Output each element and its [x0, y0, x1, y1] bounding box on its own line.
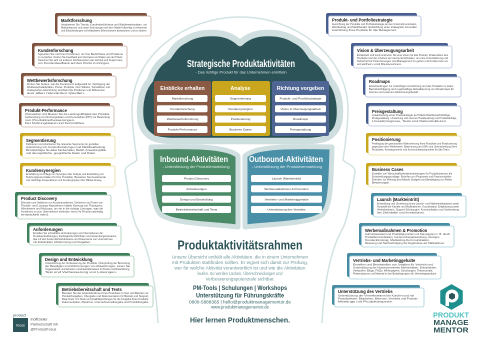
card: Vision: Sicherheit für Finanzierungen und Management zu geben und Konferenzen zu — [357, 59, 448, 63]
card: Produkt- und Portfoliostrategie: Ausrichtung der Produkte und Portfoliostrategie an den Unternehmenszielen, — [332, 22, 417, 26]
tagline: Hier lernen Produktmenschen. — [190, 316, 290, 324]
heading: Outbound: Outbound-Aktivitäten — [249, 155, 323, 164]
card: Launch: Entwicklung und Umsetzung eines Launch- und Markteintrittsplanes sowie — [377, 202, 459, 206]
card: Roadmaps — [363, 74, 461, 97]
logo: product focus: Partnerschaft mit — [30, 322, 58, 326]
card: Werbemaßnahmen — [359, 223, 454, 247]
card: Unterstützung des Vertriebs: Produktwissen. Bearbeiten, Betreuen, Vertriebs und Produkt- — [338, 296, 418, 300]
card: Launch: der Zielmärkte und Investitionen. — [377, 210, 425, 214]
card: Anforderungen: mit Entwicklern Abstimmung und Vorgaben. — [33, 240, 91, 244]
pill: Vertriebs- und Marketinggehalte: Vertriebs- und Marketinggehalte — [265, 197, 309, 201]
card: Betriebsbereitschaft und Tests — [56, 283, 153, 307]
card: Produkt- und Portfoliostrategie — [326, 13, 421, 36]
panel heading: Analyse: Analyse — [231, 86, 251, 92]
description paragraph: laufen. So werden Lücken, Überschneidungen und — [198, 270, 283, 276]
card: Wettbewerbsforschung: strategischen Ausrichtung. Ermitteln Sie Positionen und Differenzen — [27, 88, 105, 92]
panel: Richtung vorgeben — [272, 81, 329, 136]
card: Preisgestaltung: Ausarbeitung einer Preisstrategie auf Markt-Wettbewerbsfähige — [372, 113, 450, 117]
logo: product focus: @ProductFocus — [30, 328, 57, 332]
wordmark: MENTOR — [434, 326, 468, 334]
card: Betriebsbereitschaft und Tests: Betriebsbereitschaft und Tests — [62, 287, 122, 292]
card: Werbemaßnahmen: Kundenbindung, Marketing-Kommunikation. — [365, 238, 430, 242]
card: Wettbewerbsforschung: aus allen relevanten Quellen. — [27, 91, 85, 95]
card: Business Cases: Bewertungen. — [372, 180, 390, 184]
description paragraph: Unsere Übersicht enthält alle Aktivitäten, die in einem Unternehmen — [172, 254, 308, 260]
panel: Inbound-Aktivitäten — [151, 147, 238, 227]
card: Kundensynergien — [20, 163, 115, 187]
card: Segmentierung: Ausrichtung von Kundenbeziehungen und Marktbearbeitung. — [26, 145, 106, 149]
contact details — [189, 300, 292, 310]
card: Kundensynergien: Nutzungspotenzialen für Ihre Produkte. Bewerten Sie bestehende — [26, 175, 106, 179]
card: Unterstützung des Vertriebs: Unterstützung der Vertriebsteams bei Kunden und mit — [338, 294, 414, 298]
card: Positionierung: Produktes, Kernargumente und Kommunikationspunkte für das Team. — [372, 148, 450, 152]
card: Betriebsbereitschaft und Tests: Beta-Tests, UX-Tests und Qualitätsprüfungen für die Freigabe Ihres Produkts. — [62, 297, 149, 301]
card: Produkt- und Portfoliostrategie: Produkt- und Portfoliostrategie — [332, 18, 393, 22]
card: Business Cases: Einholen zur Wirkung des Ablaufs, Budgets und Bestätigung von Risiko — [372, 178, 452, 182]
card: Werbemaßnahmen: Werbemaßnahmen & Promotion — [365, 228, 428, 233]
card: Kundensynergien: Entwicklung und Pflege von Synergien über Analyse und Entwicklung von — [26, 172, 104, 176]
card: Design und Entwicklung: Ungewissheit und Arbeiten mit Entwicklerteams in Praxis und Entwicklung, — [45, 267, 130, 271]
card: Vertriebs- und Marketinggehalte — [347, 253, 441, 279]
pill: Design und Entwicklung: Design und Entwicklung — [180, 197, 213, 201]
pill: Betriebsbereitschaft und Tests: Betriebsbereitschaft und Tests — [176, 208, 218, 212]
card: Segmentierung — [20, 133, 115, 158]
card: Roadmaps: Roadmaps — [369, 79, 391, 84]
card: Kundensynergien: Kundensynergien — [26, 168, 61, 173]
card: Design und Entwicklung: Unterstützung der Verbesserung der Produkte, Überprüfung der Benutzung — [45, 261, 130, 265]
card: Launch: Vertriebsteams, Support-Schulungen, Kommunikation und Vorbereitung — [377, 208, 459, 212]
card: Positionierung — [366, 133, 461, 155]
pill: Segmentierung: Segmentierung — [230, 97, 251, 101]
card: Unterstützung des Vertriebs: Unterstützung des Vertriebs — [338, 289, 393, 294]
description paragraph: mit Produkten stattfinden sollten. Er eignet sich damit zur Prüfung, — [172, 260, 308, 265]
contact details: www.produktmanagementor.de — [211, 304, 269, 310]
pill: Wettbewerbsforschung: Wettbewerbsforschung — [167, 117, 199, 121]
pill: Vision: Vision & Überzeugungsarbeit — [280, 107, 321, 111]
card: Werbemaßnahmen: Produktkommunikation, Content-Übergabewerbung, Anzeigen, — [365, 235, 440, 239]
icon: hexagon — [441, 285, 462, 309]
card: Preisgestaltung: Preisgestaltung. Umsetzung und internen Preisberatung und Produktabfolge, — [372, 116, 457, 120]
panel heading: Richtung vorgeben: Richtung vorgeben — [277, 86, 324, 92]
card: Marktforschung: und Entscheidungen mit belastbaren Erkenntnissen abzusichern und zu stützen. — [61, 28, 147, 32]
heading: Inbound: Inbound-Aktivitäten — [160, 155, 228, 164]
main title: Produktaktivitätsrahmen — [178, 238, 302, 252]
card: Business Cases: Erstellen von Wirtschaftlichkeitsbetrachtungen für Produktchancen als — [372, 172, 453, 176]
heading: strategic activities: Strategische Produktaktivitäten — [187, 59, 295, 70]
card: Marktforschung: Analysieren Sie Trends, Kundenbedürfnisse und Wettbewerbsdaten, um — [61, 22, 148, 26]
card: Design und Entwicklung: Test und Verbesserung von Lösungen. — [45, 270, 117, 274]
card: Vision: Entwickeln und kommunizieren Sie eine Vision für das Produkt. Präsentation des — [357, 53, 449, 57]
pill: Product Discovery: Product Discovery — [184, 177, 210, 181]
card: Produkt-Performance — [19, 103, 114, 127]
panel heading: Einblicke erhalten: Einblicke erhalten — [160, 86, 205, 92]
card: Anforderungen: Erstellen Sie einheitliche Anforderungen und Informationen der — [33, 231, 103, 235]
card: Anforderungen: Produktentwicklungen, Fachlogische Richtlinien und Anwendungsszenarien, — [33, 234, 117, 238]
card: Betriebsbereitschaft und Tests: Dokumentation, Abnahme, Unternehmensübergabe und Produktfreigabe. — [62, 300, 149, 304]
card: Positionierung: Positionierung — [372, 137, 401, 142]
card: Product Discovery: Wireframes und Mockups, um sie in die richtige Lösungen, was die — [21, 206, 103, 210]
card: Produkt-Performance: Überwachen und Messen Sie die Leistungsfähigkeit des Produkts. — [25, 112, 110, 116]
pill: Anforderungen: Anforderungen — [186, 187, 207, 191]
card: Design und Entwicklung: Design und Entwicklung — [45, 257, 93, 262]
logo: product focus: product — [13, 312, 27, 318]
card: Vertriebs- und Marketinggehalte: Vertriebs- und Marketinggehalte — [353, 258, 416, 263]
card: Unterstützung des Vertriebs — [332, 285, 424, 307]
subheading: strategic activities: - Das richtige Produkt für das Unternehmen ermitteln — [196, 70, 286, 74]
card: Anforderungen: Anforderungen — [33, 227, 63, 232]
card: Design und Entwicklung — [39, 253, 134, 277]
pill: Launch: Launch (Markteintritt) — [272, 177, 301, 181]
card: Design und Entwicklung: der Beteiligten und Abstimmungen von Abweichungen, Lösen Sie — [45, 264, 130, 268]
card: Anforderungen — [27, 223, 121, 245]
card: Segmentierung: Segmentierung — [26, 138, 56, 143]
card: Product Discovery: Erkunden und Validieren von Kundenproblemen. Definieren und Testen von — [21, 200, 103, 204]
wordmark: PRODUKT — [433, 312, 470, 320]
card: Launch — [371, 193, 466, 217]
card: Werbemaßnahmen: Aufmerksamkeit und Produktpromotion mit Kampagnen z. B. durch — [365, 232, 450, 236]
card: Kundensynergien: und zukünftige Kooperationen und Kundengruppen über Märkte hinweg. — [26, 178, 102, 182]
logo: product focus: focus — [16, 324, 25, 328]
panel: Analyse — [212, 81, 270, 136]
card: Vertriebs- und Marketinggehalte: Erstellen und Bereitstellen von Inhalten für Vertrieb und — [353, 262, 434, 266]
subheading: Inbound: - Unterstützung der Produktentwicklung — [162, 164, 230, 169]
pill: Marktforschung: Marktforschung — [172, 97, 193, 101]
head outline — [125, 17, 355, 323]
logo: Produkt Manage Mentor — [433, 285, 470, 334]
card: Marktforschung — [55, 13, 151, 36]
pill: Preisgestaltung: Preisgestaltung — [290, 128, 311, 132]
card: Produkt-Performance: von Produktverbesserungen. — [25, 118, 75, 122]
panel: Outbound-Aktivitäten — [245, 147, 332, 227]
panel: Einblicke erhalten — [154, 81, 211, 136]
support line: Unterstützung für Führungskräfte — [196, 292, 284, 300]
card: Kundenforschung: zu verstehen. Nutzen Sie Feedback aus Interviews und Daten aus der Praxis. — [38, 55, 123, 59]
logo: product focus — [13, 312, 58, 332]
card: Anforderungen: das mit den besten Entwicklerteams und Dokumente von Unternehmen — [33, 237, 113, 241]
card: Vision: Produkts und der Chance an interne Entscheider, um eine Unterstützung und — [357, 56, 448, 60]
card: Produkt-Performance: Aufbereitung von Nutzungsdaten und Kennzahlen (KPI) zur Bewertung — [25, 115, 110, 119]
card: Launch: Launch (Markteintritt) — [377, 197, 420, 202]
card: Vision: Vision & Überzeugungsarbeit — [357, 48, 415, 53]
card: Segmentierung: und demografische, geografische Daten und Daten. — [26, 151, 96, 155]
card: Business Cases: Entscheidungsgrundlage. Erstellen von Prognosen und Finanzmodellen. — [372, 174, 452, 178]
card: Preisgestaltung: Umsatzprognose, Tests und Datenstrukturen. — [372, 119, 447, 123]
card: Vertriebs- und Marketinggehalte: Verkaufen: Blogs, FAQs, Whitepapers, Schulungen, Testimonials, — [353, 268, 433, 272]
card: Kundenforschung: Sprechen Sie mit Ihren Kundinnen, um ihre Bedürfnisse und Probleme — [38, 52, 123, 56]
card: Vision: erreichen und Ressourcen. — [357, 62, 402, 66]
card: Unterstützung des Vertriebs: Meetings mit Produktexperte. — [338, 300, 393, 304]
card: Product Discovery: Kundinnen zu zum Unternehmen einbinden, bevor Ihr Produkt nachhaltig — [21, 210, 103, 214]
description paragraph: Verbesserungspotenziale sichtbar. — [206, 276, 274, 282]
logo: product focus: Inoffizieller — [30, 318, 48, 322]
description paragraph: wer für welche Aktivität verantwortlich ist und wie die Aktivitäten — [174, 266, 306, 270]
card: Roadmaps: Berücksichtigung und regelmäßige Aktualisierung von Roadmaps für — [369, 87, 454, 91]
wordmark — [433, 312, 470, 334]
card: Segmentierung: Definieren und priorisieren Sie relevante Segmente zur gezielten — [26, 142, 99, 146]
card: Vision — [351, 43, 452, 68]
card: Business Cases — [366, 163, 461, 187]
pill: Positionierung: Positionierung — [231, 117, 251, 121]
card: Preisgestaltung: Preisgestaltung — [372, 109, 403, 114]
card: Kundenforschung: Tauschen Sie sich mit anderen Fachbereichen wie Vertrieb und Support aus, — [38, 58, 123, 62]
pill: Produkt-Performance: Produkt-Performance — [168, 128, 197, 132]
card: Positionierung: gegenüber dem Wettbewerb. Bestimmung der USPs und Unterscheidung Ihres — [372, 144, 458, 148]
pill: Kundensynergien: Kundensynergien — [228, 107, 253, 111]
card: Business Cases: Business Cases — [372, 167, 404, 172]
card: Launch: Auswahl der Kanäle und Maßnahmen. Koordination Zeitplanung sowie — [377, 204, 459, 208]
description paragraph — [172, 254, 308, 282]
pill: Werbemaßnahmen: Werbemaßnahmen & Promotion — [264, 187, 309, 191]
card: Produkt-Performance: Produkt-Performance — [25, 108, 68, 113]
pill: Kundenforschung: Kundenforschung — [170, 107, 195, 111]
pill: Unterstützung des Vertriebs: Unterstützung des Vertriebs — [267, 208, 306, 212]
card: Product Discovery: Produkt- und Lösungs-Hypothesen mittels Nutzung von Prototypen, — [21, 204, 103, 208]
card: Vertriebs- und Marketinggehalte: Präsentationen und Material in den Bedarfsgruppen für Vertriebsgespräche. — [353, 272, 437, 276]
card: Werbemaßnahmen: Messung und Nachverfolgung der Ergebnisse der Maßnahmen. — [365, 241, 445, 245]
services line: PM-Tools | Schulungen | Workshops — [193, 285, 287, 292]
card: Vertriebs- und Marketinggehalte: Unterstützung der Nutzerzentrierten Mehrinhalten, Entscheiden, — [353, 266, 437, 270]
card: Produkt- und Portfoliostrategie: Wertbeitrag und Marktbedarf. Entwicklung einer strategisch sinnvollen — [332, 25, 417, 29]
card: Wettbewerbsforschung: Wettbewerbsaktivitäten, Preise, Produkte, ihrer Stärken, Schwächen und — [27, 85, 110, 89]
card: Produkt- und Portfoliostrategie: Ausrichtung Ihres Produkts für das Management. — [332, 28, 397, 32]
pill: Produkt- und Portfoliostrategie: Produkt- und Portfoliostrategie — [280, 97, 322, 101]
contact details: 0800-5888365 | hello@produktmanagementor.de — [189, 300, 292, 304]
card: Wettbewerbsforschung — [21, 73, 116, 97]
card: Betriebsbereitschaft und Tests: Bereiten Sie die Inbetriebnahme Ihres Produktes in Test und Betrieb vor: — [62, 291, 149, 295]
card: Roadmaps: Entscheidungen zur zukünftigen Ausrichtung und des Produkts zu teilen. — [369, 84, 454, 88]
card: Product Discovery — [15, 192, 111, 219]
card: Positionierung: Festlegung der gewünschten Wahrnehmung Ihres Produktes und Positionierung — [372, 142, 457, 146]
brain: strategic activities — [140, 33, 340, 141]
card: Product Discovery: Product Discovery — [21, 196, 58, 201]
card: Wettbewerbsforschung: Wettbewerbsforschung — [27, 78, 73, 83]
card: Kundenforschung: Kundenforschung — [38, 48, 74, 53]
card: Segmentierung: Berücksichtigen Sie dabei Kaufverhalten, Bedarf, Anwendungsfälle — [26, 148, 106, 152]
pill: Business Cases: Business Cases — [229, 128, 252, 132]
card: Wettbewerbsforschung: Finden Sie heraus, wie die Konkurrenz aufgestellt ist. Verfolgung der — [27, 82, 110, 86]
wordmark: MANAGE — [434, 319, 469, 327]
card: Product Discovery: entwickelt wird. — [21, 212, 49, 216]
card: Kundenforschung: um Kundenfeedback auf den Punkt zu bringen. — [38, 61, 110, 65]
pill: Roadmaps: Roadmaps — [293, 117, 308, 121]
subheading: Outbound: - Unterstützung der Produktvermarktung — [252, 164, 322, 169]
card: Produkt-Performance: Der Nutzungsstand und Kennzahlen. — [25, 121, 85, 125]
card: Betriebsbereitschaft und Tests: Produktfreigaben, Übergabe und Dokumentation für Betrieb und Support, — [62, 294, 149, 298]
card: Marktforschung: Marktforschung — [61, 18, 92, 23]
card: Marktforschung: Marktchancen und neue Strömungen auf dem Markt frühzeitig zu erkennen — [61, 26, 147, 30]
card: Kundenforschung — [32, 43, 127, 68]
card: Roadmaps: internen und externen Abstimmungsbedarf. — [369, 90, 419, 94]
card: Preisgestaltung — [366, 103, 461, 126]
